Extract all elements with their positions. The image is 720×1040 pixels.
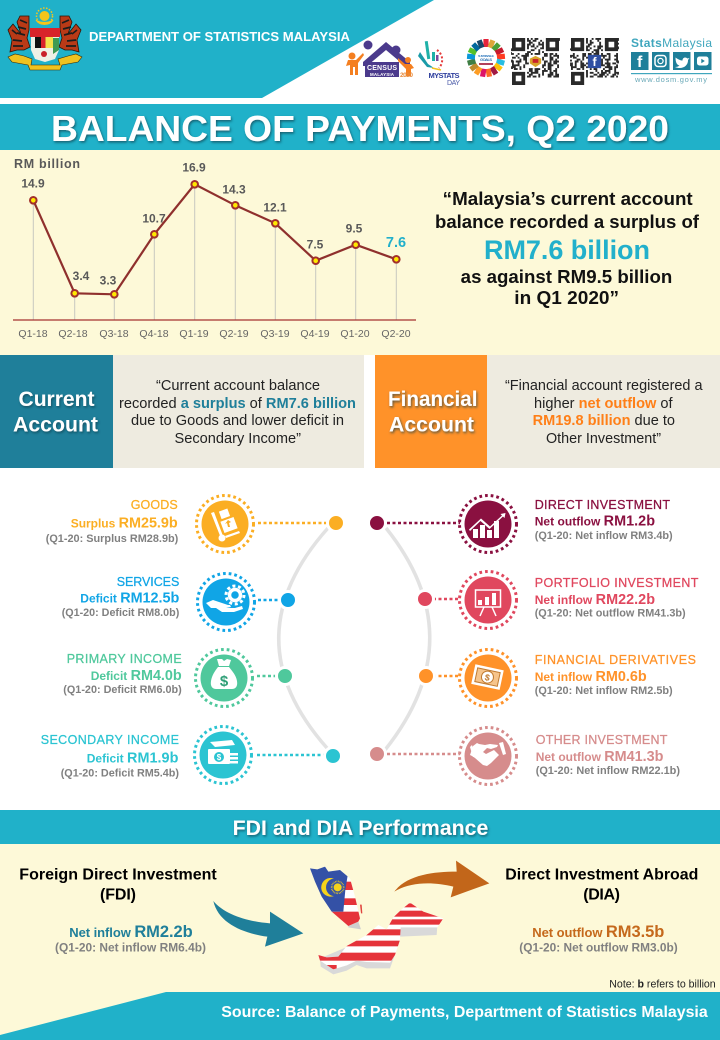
item: goods: GOODS: [131, 498, 178, 512]
item: other investment: [368, 728, 680, 784]
line chart: current account balance: RM billion: [14, 157, 80, 171]
icon: cash stack: [208, 740, 238, 764]
line chart: current account balance: Q1-19: [179, 328, 209, 340]
panel: current account summary: Current: [18, 388, 95, 411]
panel: direct investment abroad: (Q1-20: Net outflow RM3.0b): [519, 941, 678, 955]
icon: banknote: [471, 664, 504, 690]
department name: DEPARTMENT OF STATISTICS MALAYSIA: [89, 29, 351, 44]
item: portfolio investment: [416, 572, 699, 628]
quote: headline: as against RM9.5 billion: [461, 266, 672, 287]
icon: hand with gear: [206, 586, 244, 612]
header banner: [0, 0, 720, 104]
quote: headline: in Q1 2020”: [514, 287, 619, 308]
item: primary income: (Q1-20: Deficit RM6.0b): [63, 684, 182, 696]
quote: headline: [435, 188, 700, 308]
text: financial account quote: higher net outflow of: [534, 395, 673, 412]
footer: source: [0, 992, 720, 1040]
item: portfolio investment: PORTFOLIO INVESTMENT: [535, 576, 699, 590]
icon: presentation board: [476, 590, 500, 616]
item: portfolio investment: Net inflow RM22.2b: [535, 592, 655, 608]
icon: coat of arms: [8, 8, 82, 70]
item: secondary income: Deficit RM1.9b: [87, 751, 179, 767]
line chart: current account balance: Q1-18: [18, 328, 48, 340]
text: financial account quote: “Financial account registered a: [505, 377, 703, 394]
logo: mystats day: MYSTATS: [428, 71, 460, 80]
logo: stats malaysia social links: f: [637, 54, 643, 71]
item: portfolio investment: (Q1-20: Net outflow RM41.3b): [535, 608, 686, 620]
map: peninsular malaysia: [307, 865, 363, 929]
logo: sustainable development goals wheel: SUSTAINABLE: [478, 54, 494, 58]
item: goods: Surplus RM25.9b: [71, 516, 178, 532]
panel: financial account summary: Account: [389, 414, 474, 436]
icon: money bag: [211, 659, 237, 690]
item: financial derivatives: Net inflow RM0.6b: [535, 669, 647, 685]
logo: stats malaysia social links: StatsMalaysia: [631, 36, 712, 50]
line chart: current account balance: Q4-19: [300, 328, 330, 340]
icon: money bag: $: [220, 673, 229, 690]
item: secondary income: SECONDARY INCOME: [41, 733, 179, 747]
line chart: current account balance: Q1-20: [340, 328, 370, 340]
panel: direct investment abroad: (DIA): [583, 886, 620, 903]
logo: sustainable development goals wheel: [467, 39, 505, 77]
item: primary income: [63, 650, 293, 706]
logo: mystats day: [418, 41, 460, 87]
item: financial derivatives: [418, 650, 696, 706]
panel: foreign direct investment: (Q1-20: Net inflow RM6.4b): [55, 941, 206, 955]
panel: financial account summary: [375, 355, 720, 468]
logo: stats malaysia social links: www.dosm.gov.my: [634, 75, 707, 84]
text: current account quote: Secondary Income”: [174, 430, 301, 447]
panel: foreign direct investment: (FDI): [100, 886, 136, 903]
item: other investment: Net outflow RM41.3b: [536, 749, 664, 765]
panel: current account summary: Account: [13, 414, 98, 436]
line chart: current account balance: [13, 157, 416, 340]
item: primary income: Deficit RM4.0b: [91, 668, 182, 684]
item: other investment: OTHER INVESTMENT: [536, 733, 668, 747]
quote: headline: RM7.6 billion: [484, 235, 650, 265]
quote: headline: balance recorded a surplus of: [435, 211, 700, 232]
line chart: current account balance: 14.3: [222, 182, 246, 196]
icon: banknote: $: [484, 672, 491, 683]
item: direct investment: [368, 496, 673, 552]
line chart: current account balance: 7.5: [307, 238, 324, 252]
arrow: inflow: [213, 901, 303, 947]
text: current account quote: [119, 377, 356, 447]
qr code: website: [512, 38, 559, 85]
logo: census 2020: 2020: [400, 72, 413, 79]
panel: foreign direct investment: [19, 866, 217, 955]
item: services: [62, 574, 297, 630]
map of malaysia with arrows: [213, 861, 489, 974]
item: financial derivatives: (Q1-20: Net inflow RM2.5b): [535, 685, 673, 697]
line chart: current account balance: Q4-18: [139, 328, 169, 340]
section heading: fdi and dia: [0, 810, 720, 844]
item: primary income: PRIMARY INCOME: [67, 652, 182, 666]
connector arcs: [279, 528, 430, 750]
quote: headline: “Malaysia’s current account: [443, 188, 693, 209]
item: services: (Q1-20: Deficit RM8.0b): [62, 607, 180, 619]
footer: source: Source: Balance of Payments, Department of Statistics Malaysia: [221, 1004, 708, 1021]
map: east malaysia: [313, 903, 447, 974]
item: direct investment: Net outflow RM1.2b: [535, 514, 655, 530]
panel: direct investment abroad: [505, 866, 698, 955]
panel: foreign direct investment: Net inflow RM2.2b: [69, 923, 193, 941]
line chart: current account balance: 7.6: [386, 235, 406, 251]
icon: rising bar chart: [469, 513, 506, 538]
item: goods: [46, 496, 344, 552]
line chart: current account balance: 3.3: [100, 274, 117, 288]
panel: financial account summary: Financial: [388, 388, 478, 411]
line chart: current account balance: 14.9: [21, 176, 45, 190]
note: Note: b refers to billion: [609, 979, 716, 991]
line chart: current account balance: 16.9: [182, 160, 206, 174]
text: current account quote: “Current account balance: [156, 377, 320, 394]
line chart: current account balance: Q2-19: [219, 328, 249, 340]
arrow: outflow: [394, 861, 489, 897]
text: current account quote: recorded a surplus of RM7.6 billion: [119, 395, 356, 412]
icon: handshake: [470, 742, 506, 766]
item: financial derivatives: FINANCIAL DERIVATIVES: [535, 653, 696, 667]
section heading: fdi and dia: FDI and DIA Performance: [233, 817, 488, 840]
qr code: facebook: f: [592, 55, 597, 69]
logo: mystats day: DAY: [447, 80, 460, 87]
text: financial account quote: Other Investment”: [546, 430, 661, 447]
text: current account quote: due to Goods and lower deficit in: [131, 412, 344, 429]
line chart: current account balance: Q3-19: [260, 328, 290, 340]
panel: direct investment abroad: Net outflow RM3.5b: [532, 923, 664, 941]
line chart: current account balance: 12.1: [263, 200, 287, 214]
text: financial account quote: RM19.8 billion due to: [533, 412, 675, 429]
panel: fdi and dia background: [0, 844, 720, 1040]
logo: sustainable development goals wheel: GOALS: [480, 57, 492, 62]
item: goods: (Q1-20: Surplus RM28.9b): [46, 533, 179, 545]
item: direct investment: DIRECT INVESTMENT: [535, 498, 670, 512]
line chart: current account balance: 10.7: [142, 212, 166, 226]
line chart: current account balance: 9.5: [346, 222, 363, 236]
logo: census 2020: MALAYSIA: [370, 72, 395, 77]
line chart: current account balance: Q3-18: [99, 328, 129, 340]
item: secondary income: [41, 726, 341, 784]
panel: current account chart and quote: [0, 150, 720, 355]
text: financial account quote: [505, 377, 703, 447]
line chart: current account balance: 3.4: [73, 269, 90, 283]
line chart: current account balance: Q2-18: [58, 328, 88, 340]
logo: stats malaysia social links: [631, 36, 712, 84]
panel: foreign direct investment: Foreign Direct Investment: [19, 866, 217, 883]
item: other investment: (Q1-20: Net inflow RM22.1b): [536, 765, 680, 777]
logo: census 2020: [346, 40, 414, 79]
icon: trolley with boxes: [211, 509, 240, 542]
item: services: SERVICES: [117, 575, 179, 589]
icon: cash stack: $: [217, 753, 222, 762]
qr code: facebook: [571, 38, 618, 85]
item: direct investment: (Q1-20: Net inflow RM3.4b): [535, 530, 673, 542]
title bar: BALANCE OF PAYMENTS, Q2 2020: [51, 108, 669, 149]
panel: direct investment abroad: Direct Investment Abroad: [505, 866, 698, 883]
item: services: Deficit RM12.5b: [80, 591, 180, 607]
line chart: current account balance: Q2-20: [381, 328, 411, 340]
item: secondary income: (Q1-20: Deficit RM5.4b): [61, 768, 179, 780]
panel: current account summary: [0, 355, 364, 468]
logo: census 2020: CENSUS: [367, 65, 397, 72]
